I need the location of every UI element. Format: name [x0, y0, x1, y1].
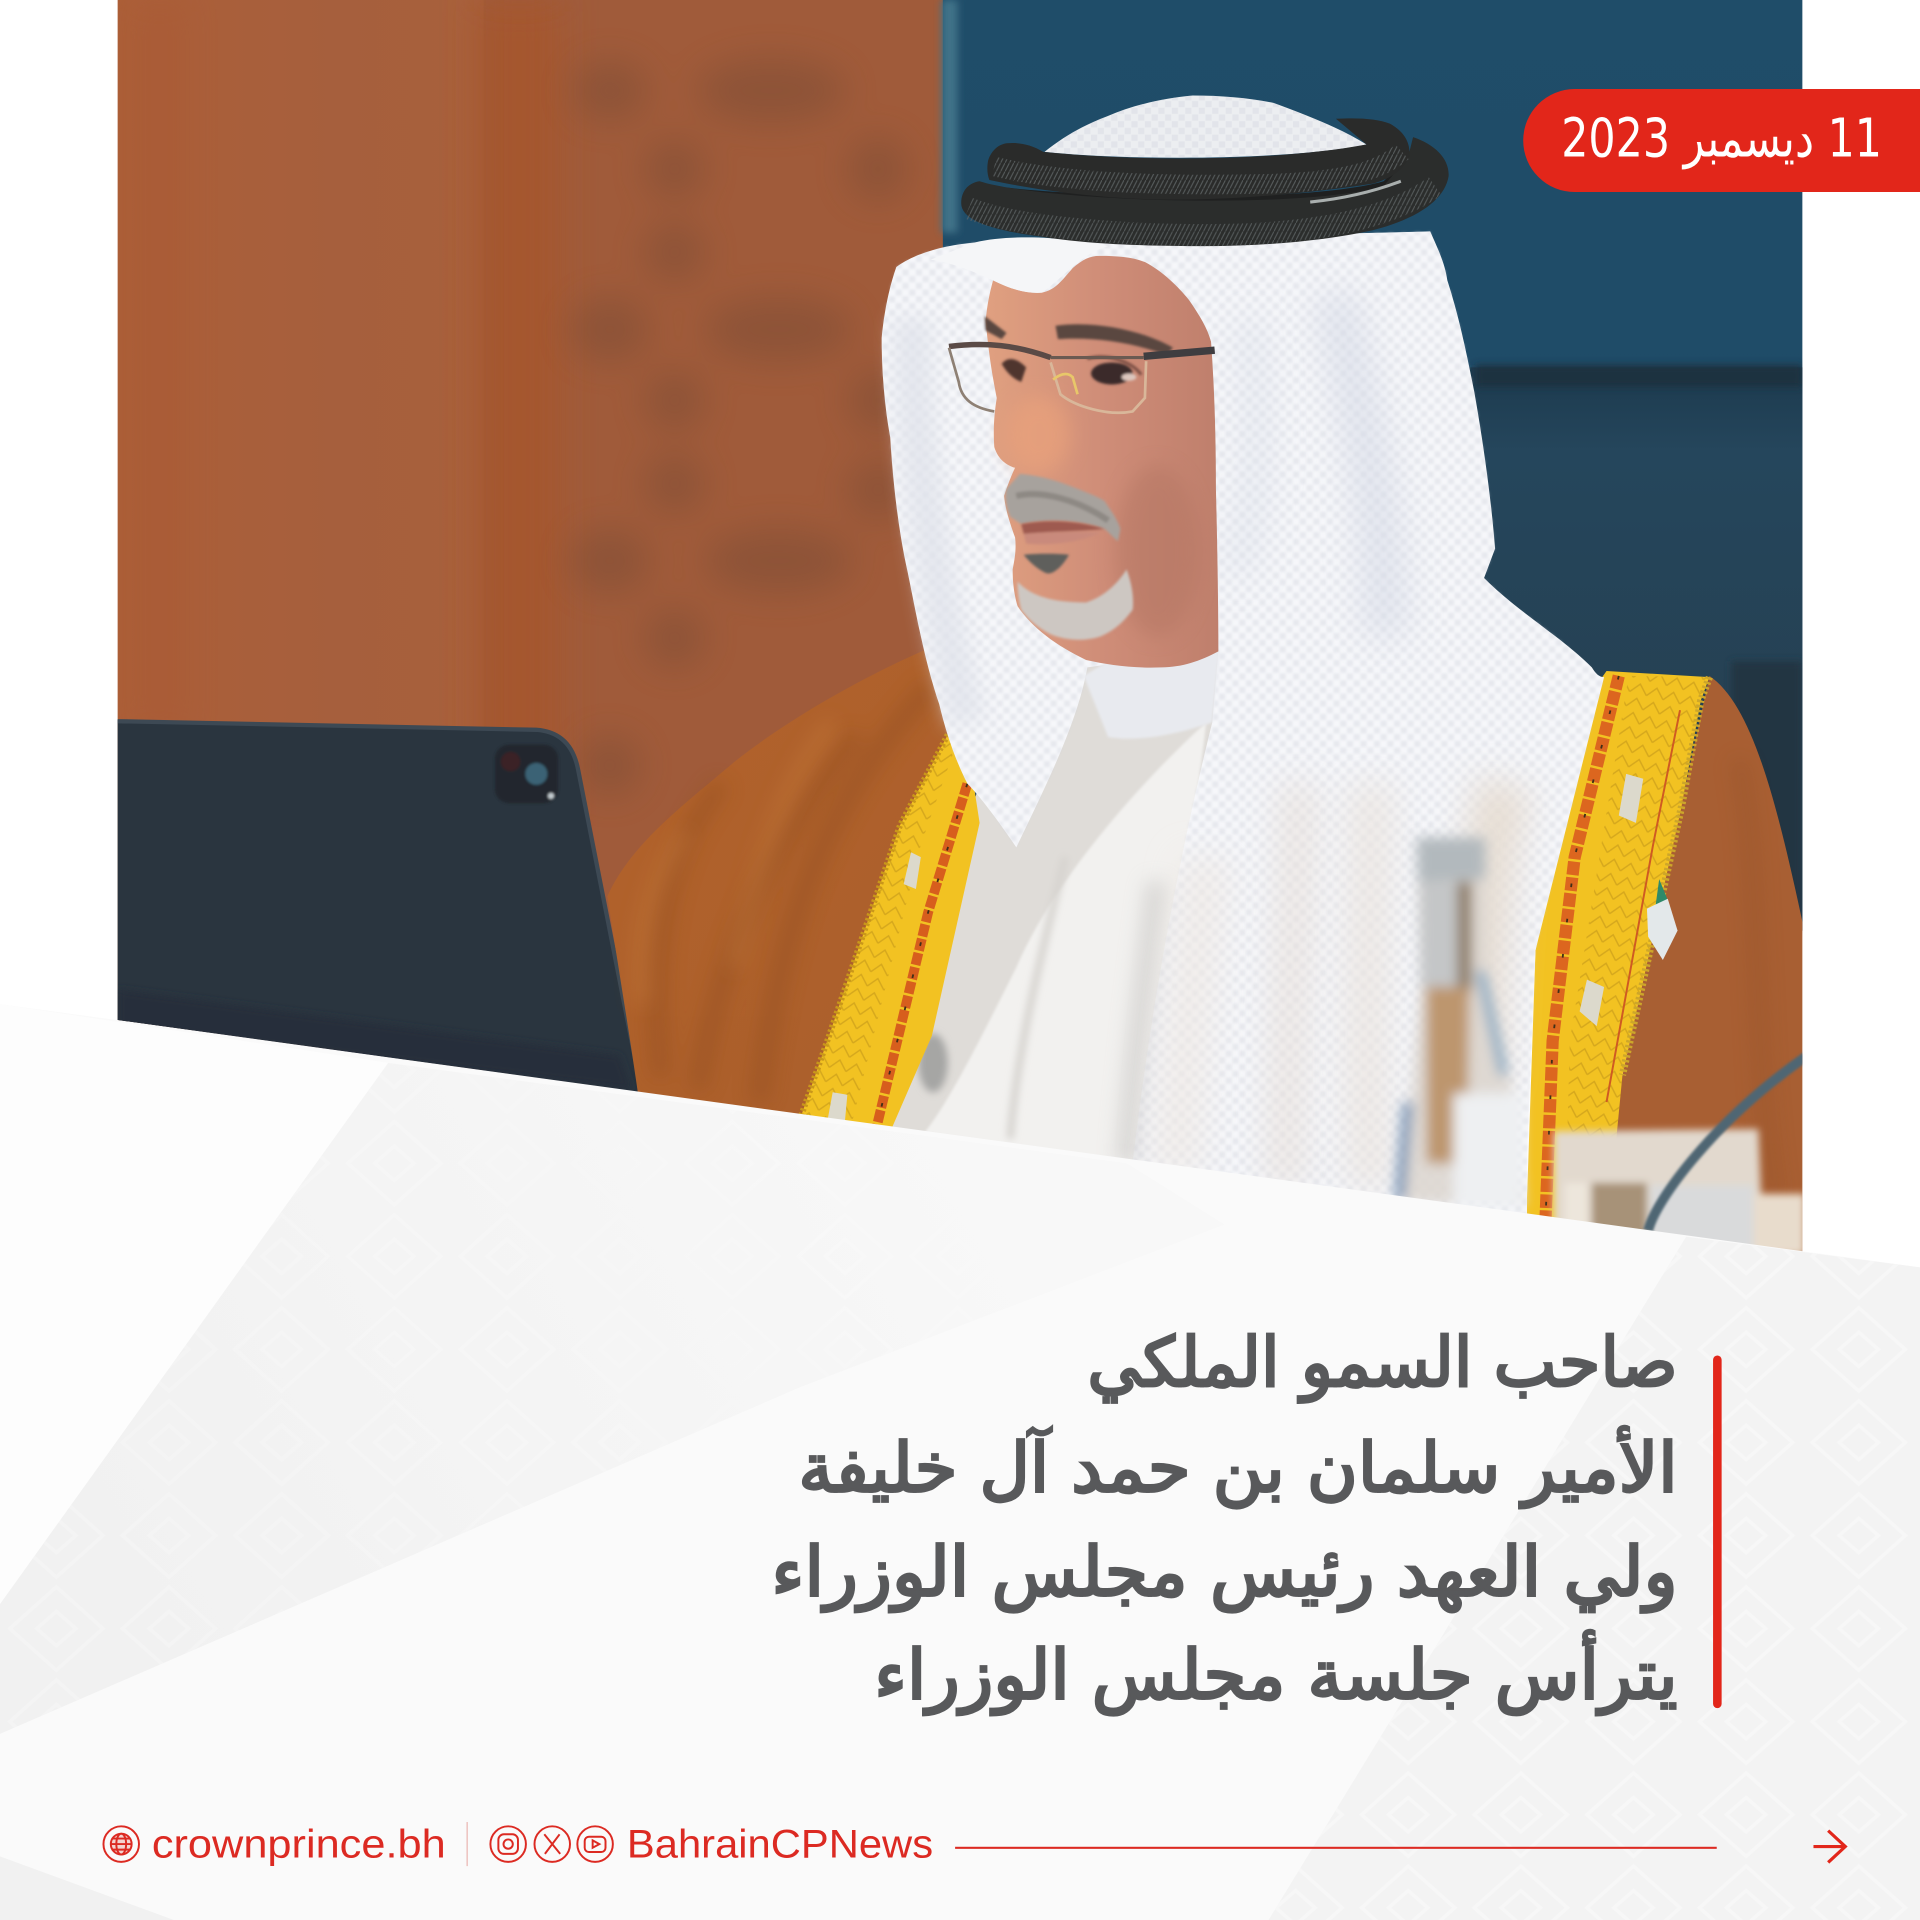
- red accent bar: [1713, 1356, 1722, 1708]
- mustache: [1006, 474, 1120, 541]
- agal rings: [961, 118, 1449, 246]
- water bottle: [1400, 838, 1524, 1206]
- eyes: [1002, 357, 1141, 384]
- gold trim right: [1527, 671, 1709, 1224]
- face: [949, 256, 1218, 668]
- handle text: BahrainCPNews: [627, 1823, 933, 1867]
- background facet: right patterned: [1269, 1237, 1920, 1920]
- wood wall: [118, 0, 943, 1080]
- date text: 11 ديسمبر 2023: [1561, 107, 1882, 170]
- background facet: top-left light: [0, 1004, 388, 1604]
- microphone stem: [1648, 1056, 1807, 1231]
- tablet camera: [495, 744, 558, 803]
- lips: [1021, 521, 1104, 544]
- icon: globe: [103, 1826, 139, 1862]
- footer: [103, 1822, 1845, 1867]
- icon: instagram: [490, 1826, 526, 1862]
- cap: [1044, 96, 1367, 158]
- eyebrows: [984, 316, 1173, 355]
- blue chair: [942, 0, 1802, 931]
- background facet: bottom-left: [0, 1856, 174, 1920]
- heading: [771, 1323, 1678, 1715]
- panel: lower text background: [0, 1004, 1920, 1920]
- soul patch: [1024, 554, 1069, 573]
- glass and desk items: [1554, 1129, 1805, 1259]
- collar: [1084, 649, 1220, 739]
- cloth fold on forehead: [931, 237, 1108, 293]
- robe left: [608, 650, 948, 1114]
- thobe: [892, 649, 1218, 1160]
- footer rule: [955, 1847, 1717, 1849]
- background facet: patterned grey: [0, 1063, 1224, 1734]
- arrow: [1813, 1831, 1845, 1862]
- icon: X: [534, 1826, 570, 1862]
- date pill: [1523, 89, 1920, 192]
- icon: youtube: [577, 1826, 613, 1862]
- heading line 3: ولي العهد رئيس مجلس الوزراء: [771, 1533, 1678, 1613]
- glasses: [949, 344, 1215, 413]
- cloth weave texture: [882, 231, 1604, 1224]
- face shading: [1118, 474, 1186, 628]
- medal pin: [1647, 879, 1678, 960]
- divider: [467, 1822, 468, 1866]
- tablet: [118, 720, 642, 1096]
- panel: photo: [118, 0, 1807, 1273]
- robe right: [1616, 676, 1802, 1252]
- heading line 4: يترأس جلسة مجلس الوزراء: [874, 1629, 1678, 1715]
- website text: crownprince.bh: [152, 1823, 446, 1867]
- heading line 2: الأمير سلمان بن حمد آل خليفة: [798, 1425, 1678, 1508]
- gold trim left: [801, 735, 980, 1129]
- white headcloth: [882, 231, 1604, 1224]
- heading line 1: صاحب السمو الملكي: [1087, 1323, 1678, 1403]
- beard: [1018, 569, 1133, 640]
